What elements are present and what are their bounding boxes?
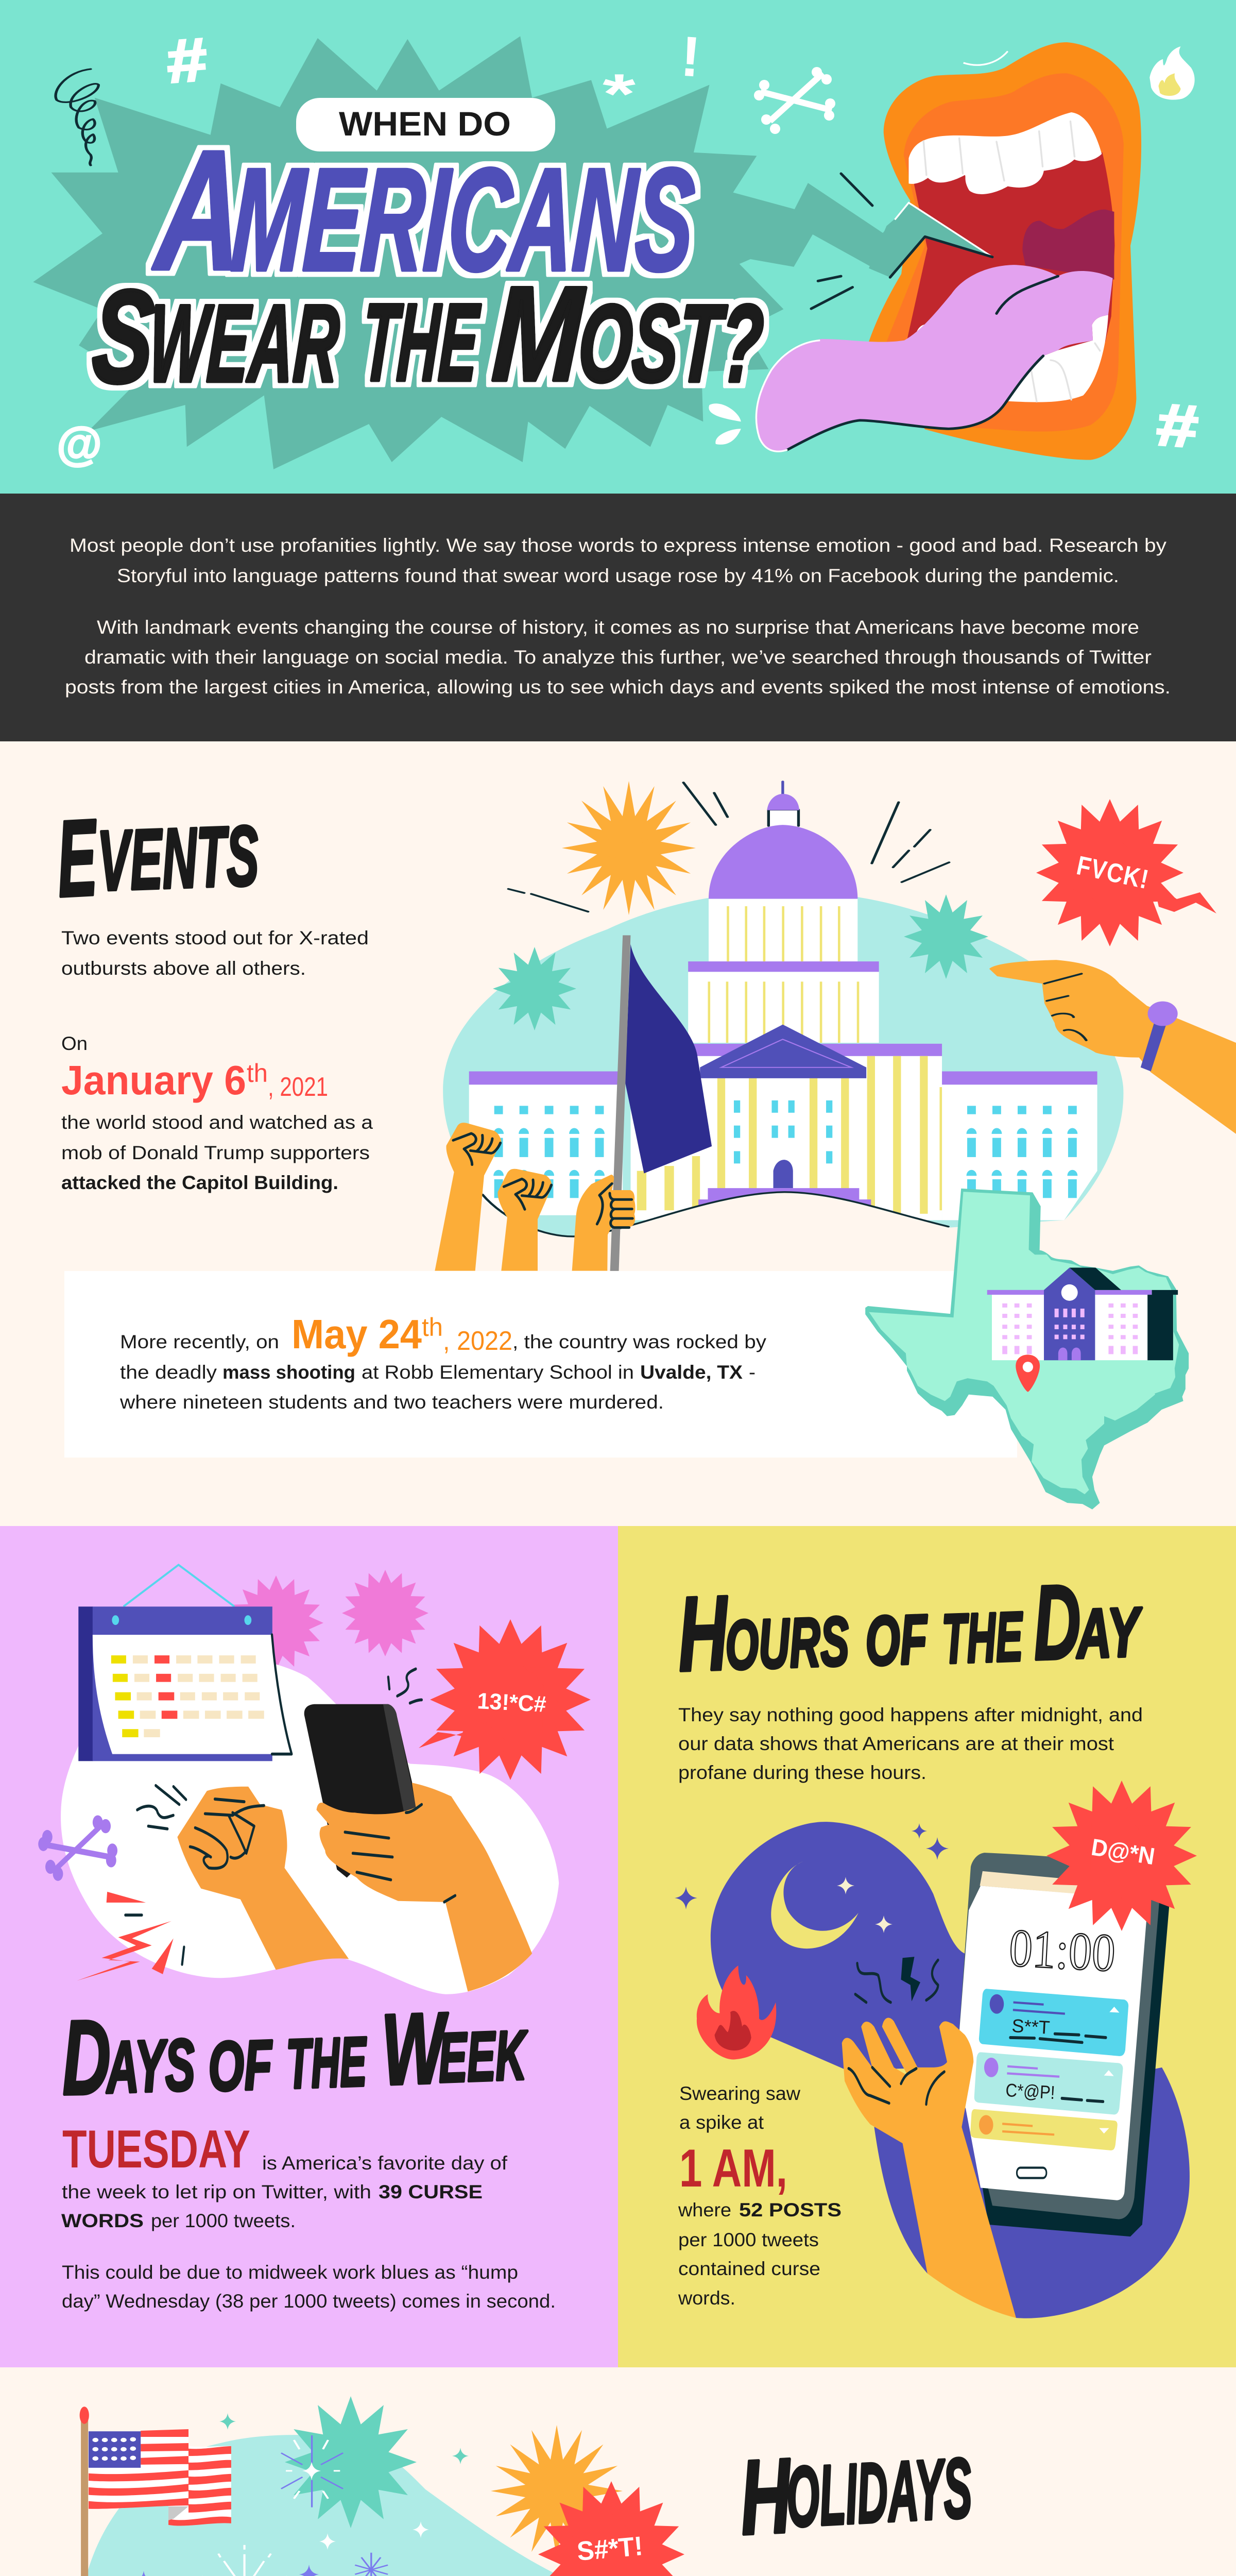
title: Swear the Most?: WEAR [146,282,342,405]
callout: FVCK burst: FVCK! [1074,851,1152,895]
text: May 24th: mass shooting [222,1362,355,1383]
panel: holidays [78,2393,1137,2576]
panel: intro text band: Most people don’t use profanities lightly. We say those words to express intense emotion - good and bad. Research by [70,535,1167,556]
text: May 24th [119,1311,767,1413]
text: May 24th: More recently, on [120,1331,279,1352]
icon: flame [697,1965,776,2059]
icon: smartphone in hand [304,1704,532,1992]
text: Tuesday: day” Wednesday (38 per 1000 tweets) comes in second. [62,2291,556,2312]
icon: asterisk: * [603,62,636,126]
icon: purple crossbones [38,1816,117,1881]
icon: at sign: @ [57,418,102,470]
title: Americans [149,115,698,305]
title: Swear the Most?: M [489,259,589,409]
text: May 24th: Uvalde, TX [640,1362,743,1383]
icon: flame [1149,46,1195,100]
text: May 24th: at Robb Elementary School in [362,1362,634,1383]
panel: intro text band: Storyful into language patterns found that swear word usage rose by 41% on Facebook during the pandemic. [117,565,1119,586]
icon: squiggle [56,69,98,165]
text: S**T: S**T [1011,2015,1051,2038]
panel: intro text band: With landmark events changing the course of history, it comes as no surprise that Americans have become more [97,617,1139,638]
text: May 24th: , the country was rocked by [512,1331,767,1352]
icon: fireworks [134,2413,469,2576]
icon: lightning and squiggles [855,1957,938,2003]
text: Tuesday: WORDS [61,2210,144,2231]
white text card [64,1271,1017,1458]
icon: white hash bottom right: # [1155,391,1200,461]
text: 1 AM spike: 52 POSTS [739,2199,842,2221]
panel: intro text band: posts from the largest cities in America, allowing us to see which days and events spiked the most intense of emotions. [65,676,1171,698]
icon: phone with notifications [957,1853,1170,2236]
title: Swear the Most?: S [89,263,158,411]
icon: map of Texas with school and pin [865,1189,1189,1510]
callout: 13!*C# burst [419,1612,598,1788]
heading: Hours of the Day: H [676,1574,731,1693]
callout: FVCK burst [1029,792,1216,954]
heading: Hours of the Day [676,1563,1144,1693]
heading: Hours of the Day: AY [1074,1593,1144,1673]
text: May 24th: where nineteen students and two teachers were murdered. [119,1392,664,1413]
illustration: teal blob [78,2435,684,2576]
text: hours intro: profane during these hours. [678,1762,926,1783]
heading: Holidays: H [737,2436,795,2557]
callout: S#*T burst: S#*T! [576,2531,644,2567]
text: 1 AM spike: words. [678,2287,735,2309]
callout: D@*N burst: D@*N [1089,1834,1157,1870]
heading: Events [54,796,260,920]
heading: Holidays [737,2436,974,2557]
text: May 24th: th [422,1313,443,1342]
text: Tuesday: TUESDAY [62,2120,250,2179]
text: Tuesday: 39 CURSE [379,2181,483,2202]
heading: Hours of the Day: OF [864,1600,930,1680]
hero starburst backdrop [33,36,924,469]
text: May 24th: - [749,1362,756,1383]
text: January 6th: January 6 [61,1057,246,1103]
text: January 6th: , 2021 [268,1072,328,1102]
panel: hero header [0,0,1236,494]
text: Tuesday: per 1000 tweets. [151,2210,296,2231]
text: Tuesday: the week to let rip on Twitter, with [62,2181,371,2202]
heading: Days of the Week: W [380,1992,452,2106]
text: hours intro: our data shows that Americans are at their most [678,1733,1114,1754]
flag with pole [610,935,712,1271]
title: Swear the Most?: THE [359,281,483,404]
heading: Days of the Week: EEK [437,2016,530,2097]
heading: Events: VENTS [96,808,260,908]
icon: burst lines [508,783,949,912]
illustration: capitol building [426,782,1123,1271]
title: Swear the Most? [89,259,766,411]
text: Tuesday: is America’s favorite day of [262,2153,508,2174]
callout: 13!*C# burst: 13!*C# [476,1688,547,1717]
text: January 6th: On [61,1033,88,1054]
callout: S#*T burst [531,2474,692,2576]
title: Swear the Most?: OST? [576,282,766,405]
icon: white hash top left: # [164,25,209,96]
icon: wall calendar [78,1565,291,1761]
text: 1 AM spike: where [678,2199,731,2221]
icon: open hand [842,2018,1016,2318]
heading: Hours of the Day: D [1032,1563,1083,1682]
icon: pink bursts [224,1566,433,1675]
callout: D@*N burst [1039,1773,1204,1938]
icon: bursts [282,2393,623,2557]
text: January 6th: mob of Donald Trump supporters [61,1142,370,1163]
icon: teal bursts [491,892,990,1032]
icon: pointing hand [989,960,1236,1134]
text: 1 AM spike: per 1000 tweets [678,2229,819,2250]
icon: crescent moon and stars [675,1823,949,1948]
panel: days of the week [0,1526,618,2367]
text: 1 AM spike: 1 AM, [679,2139,787,2198]
text: May 24th: May 24 [291,1311,422,1357]
title: Americans: A [149,115,248,305]
text: May 24th: the deadly [120,1362,217,1383]
text: hours intro [678,1704,1143,1783]
icon: orange burst [562,781,696,915]
illustration: white blob [61,1656,559,1994]
text: January 6th: attacked the Capitol Building. [61,1172,338,1193]
text: events intro: outbursts above all others. [61,958,306,979]
icon: raised fists [435,1123,636,1271]
heading: Holidays: OLIDAYS [784,2440,974,2545]
panel: intro text band: dramatic with their language on social media. To analyze this further, we’ve searched through thousands of Twitter [84,647,1152,668]
text: C*@P!: C*@P! [1005,2079,1056,2103]
icon: open mouth with tongue [756,42,1141,460]
heading: Days of the Week: D [61,1998,112,2117]
text: May 24th: , 2022 [443,1326,512,1356]
heading: Hours of the Day: THE [941,1598,1025,1678]
icon: clenched fist [137,1669,422,1970]
text: Tuesday: This could be due to midweek work blues as “hump [62,2262,518,2283]
text: 1 AM spike: Swearing saw [679,2083,800,2104]
heading: Hours of the Day: OURS [724,1602,850,1684]
text: January 6th: the world stood and watched as a [61,1112,373,1133]
text: January 6th [61,1033,373,1193]
illustration: night sky blobs [711,1822,1190,2318]
heading: Days of the Week [61,1992,530,2117]
text: 1 AM spike: a spike at [679,2112,764,2133]
heading: Days of the Week: OF [207,2026,274,2106]
panel: intro text band [0,494,1236,741]
title pill: WHEN DO [339,105,511,143]
title: Americans: MERICANS [228,139,698,301]
text: events intro: Two events stood out for X-rated [61,927,369,948]
text: 1 AM spike: contained curse [678,2258,820,2279]
text: Tuesday [61,2120,556,2312]
panel: events [54,781,1236,1510]
icon: red lightning and sparks [77,1892,184,1980]
icon: exclamation mark: ! [679,25,702,89]
heading: Days of the Week: AYS [104,2024,196,2109]
heading: Days of the Week: THE [285,2023,369,2103]
heading: Events: E [54,796,101,920]
text: January 6th: th [247,1059,268,1088]
text: 1 AM spike [678,2083,842,2309]
text: hours intro: They say nothing good happens after midnight, and [678,1704,1143,1725]
icon: crossbones [754,67,835,134]
icon: American flag [80,2406,231,2576]
title pill [296,98,555,151]
text: events intro [61,927,369,979]
panel: hours of the day [618,1526,1236,2367]
icon: water drops [709,403,741,445]
text: clock on phone: 01:00 [1008,1918,1117,1983]
